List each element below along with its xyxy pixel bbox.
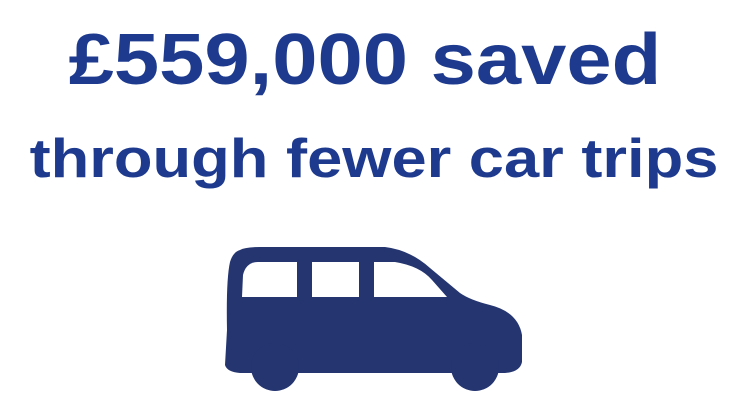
subtitle: through fewer car trips bbox=[30, 127, 718, 189]
title: amount saved: £559,000 saved bbox=[69, 20, 661, 100]
